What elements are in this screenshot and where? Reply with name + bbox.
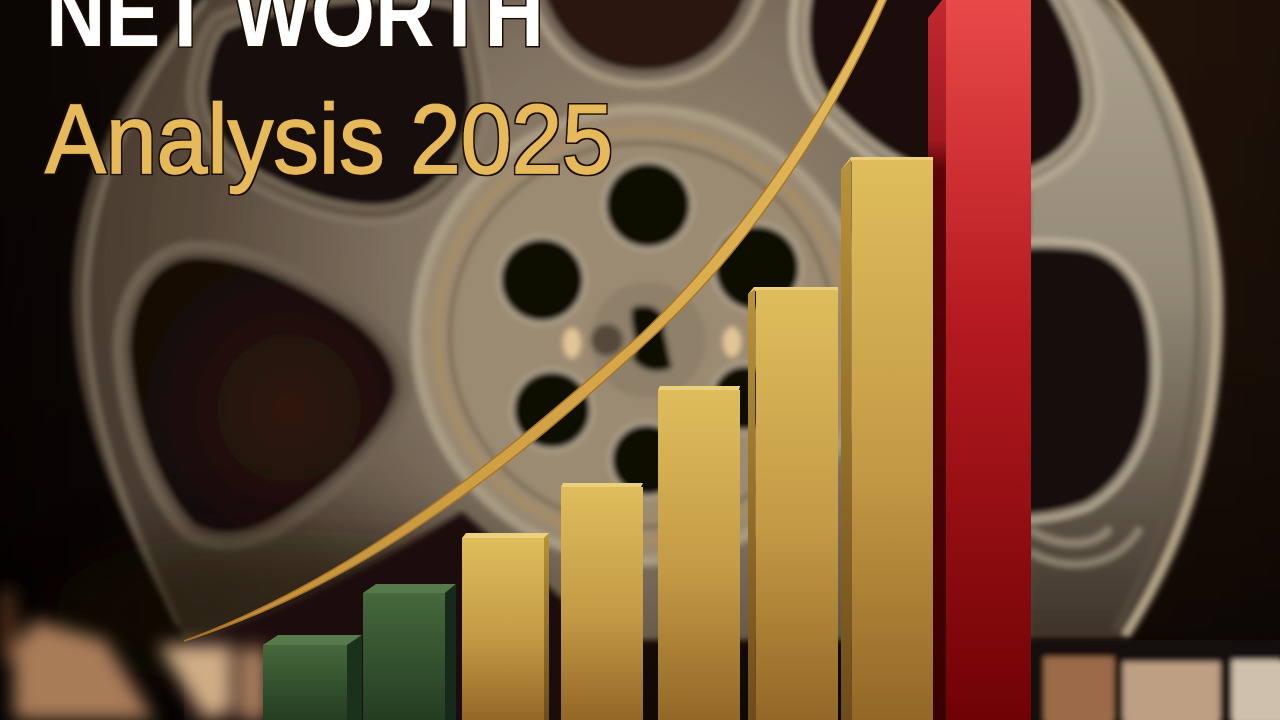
reel rim right xyxy=(1104,0,1216,635)
top window xyxy=(540,0,750,70)
bar 8 red xyxy=(928,0,1031,720)
right window xyxy=(1000,248,1150,515)
bar 4 gold xyxy=(561,483,643,720)
hub ring xyxy=(416,109,868,561)
film strip xyxy=(0,590,1280,720)
bar 1 green xyxy=(263,635,362,720)
dark area below curve xyxy=(184,512,575,720)
reel rim left xyxy=(86,0,205,625)
title line 2: Analysis 2025 xyxy=(45,84,613,194)
title xyxy=(45,0,613,194)
center spindle xyxy=(563,282,741,398)
reel right band xyxy=(1030,0,1224,640)
bar 3 gold xyxy=(462,533,549,720)
film strip right xyxy=(1030,640,1280,720)
bar 5 gold xyxy=(658,386,740,720)
bar 6 gold xyxy=(748,287,838,720)
left window xyxy=(130,258,395,533)
lower-left reel shading xyxy=(50,530,530,690)
bar chart xyxy=(263,0,1031,720)
lower-right window rings xyxy=(1030,528,1140,564)
upper-left window xyxy=(206,2,470,205)
growth curve xyxy=(184,0,888,641)
film strip left xyxy=(0,590,266,720)
hub holes xyxy=(499,161,801,497)
bar 2 green xyxy=(363,584,456,720)
bar 7 gold xyxy=(841,157,933,720)
upper-right window xyxy=(809,0,1083,178)
